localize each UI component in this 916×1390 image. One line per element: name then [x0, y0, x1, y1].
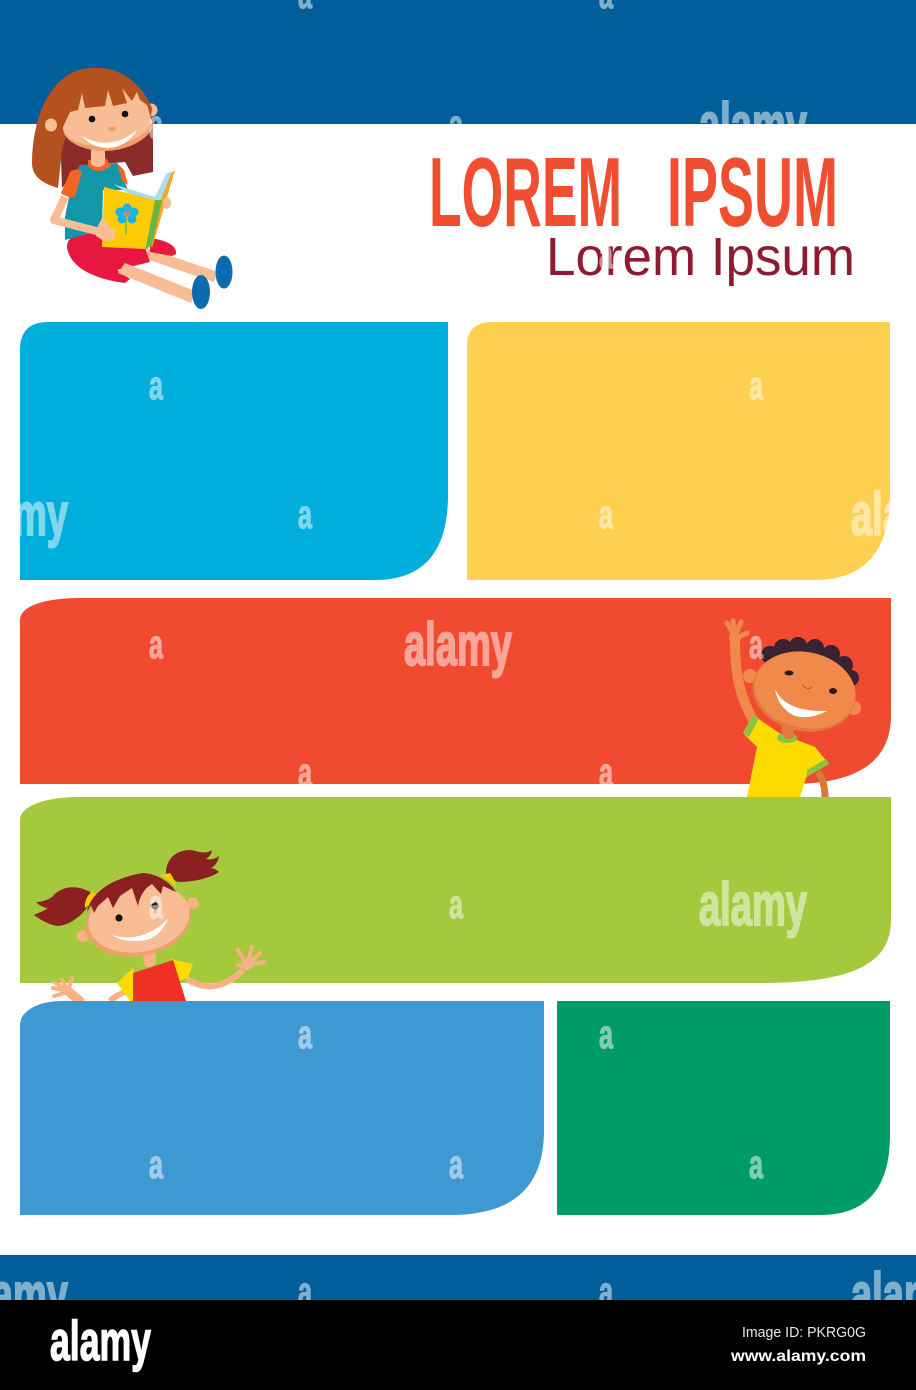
header band: [0, 0, 916, 124]
reader back leg: [143, 248, 218, 282]
girl smile: [112, 919, 168, 941]
watermarks: alamy: [699, 91, 807, 158]
girl fringe: [87, 873, 176, 913]
reader nose: [108, 127, 116, 131]
girl hair ties: [85, 892, 97, 908]
panel: sky blue: [20, 322, 448, 580]
watermarks: a: [599, 233, 613, 277]
reader face shade: [63, 105, 153, 151]
book cover: [102, 187, 155, 249]
reader smile: [82, 130, 137, 148]
watermarks: a: [149, 623, 163, 667]
book spine: [145, 200, 162, 250]
girl right hand: [238, 947, 264, 970]
character: girl with pigtails: [34, 850, 264, 1001]
girl sleeves: [117, 959, 193, 1001]
girl dress: [133, 960, 186, 1001]
book flower: [116, 204, 138, 234]
website: www.alamy.com: [730, 1348, 866, 1365]
watermarks: a: [599, 1270, 613, 1314]
reader back shorts: [150, 238, 176, 256]
girl arms: [110, 970, 243, 1001]
footer band: [0, 1255, 916, 1301]
panel: green: [20, 797, 891, 983]
watermarks: a: [749, 1143, 763, 1187]
image id: Image ID: PKRG0G: [742, 1325, 866, 1341]
watermarks: a: [149, 883, 163, 927]
girl eyes: [115, 914, 123, 922]
watermarks: a: [298, 1013, 312, 1057]
reader front leg: [118, 263, 195, 303]
boy smile: [775, 689, 827, 717]
boy nose: [803, 685, 812, 689]
girl right pigtail: [166, 850, 219, 882]
credit logo: alamy: [50, 1309, 151, 1372]
panel: red: [20, 598, 891, 784]
reader hair: [32, 68, 152, 188]
panel: mid blue: [20, 1001, 544, 1215]
girl ears: [77, 930, 89, 942]
boy shirt: [743, 715, 828, 797]
watermarks: a: [298, 751, 312, 795]
boy hand: [727, 621, 747, 644]
boy head: [745, 643, 863, 741]
reader shorts: [67, 233, 150, 283]
book back cover: [148, 170, 175, 248]
boy neck: [781, 725, 794, 739]
watermarks: a: [599, 493, 613, 537]
subtitle: Lorem Ipsum: [546, 227, 855, 287]
watermarks: a: [298, 1270, 312, 1314]
credit bar: [0, 1300, 916, 1390]
girl head: [80, 877, 196, 965]
reader arm: [54, 197, 100, 232]
watermarks: alamy: [699, 871, 807, 938]
character: boy waving: [727, 621, 863, 797]
reader shoes: [216, 256, 232, 288]
reader right ear: [144, 104, 158, 116]
watermarks: alamy: [404, 611, 512, 678]
boy collar: [777, 733, 797, 743]
reader hair back: [60, 105, 153, 188]
watermarks: a: [149, 103, 163, 147]
book pages: [113, 171, 172, 210]
watermarks: a: [599, 751, 613, 795]
title: LOREM: [429, 137, 622, 247]
panel: dark green: [557, 1001, 890, 1215]
reader eyes: [89, 116, 95, 122]
boy ears: [743, 669, 757, 683]
watermarks: a: [449, 883, 463, 927]
reader sleeves: [61, 163, 128, 197]
reader face: [63, 88, 152, 146]
watermarks: a: [149, 1143, 163, 1187]
boy sleeve trim: [743, 715, 829, 777]
girl left pigtail: [34, 887, 92, 926]
boy hair: [761, 637, 859, 687]
girl neck: [143, 950, 156, 967]
panel: yellow: [467, 322, 890, 580]
boy raised arm: [735, 640, 753, 720]
watermarks: a: [298, 493, 312, 537]
character: girl reading: [32, 68, 232, 309]
watermarks: a: [749, 364, 763, 408]
watermarks: a: [749, 623, 763, 667]
reader left ear: [45, 118, 57, 132]
watermarks: a: [599, 1013, 613, 1057]
boy lower arm: [818, 772, 825, 797]
watermarks: a: [449, 103, 463, 147]
reader neck: [88, 158, 111, 171]
watermarks: a: [449, 1143, 463, 1187]
boy eyes: [784, 670, 794, 676]
book hand: [163, 197, 171, 209]
reader hand: [96, 218, 116, 241]
watermarks: a: [149, 364, 163, 408]
girl left hand: [53, 978, 80, 1001]
reader shirt: [65, 163, 128, 240]
